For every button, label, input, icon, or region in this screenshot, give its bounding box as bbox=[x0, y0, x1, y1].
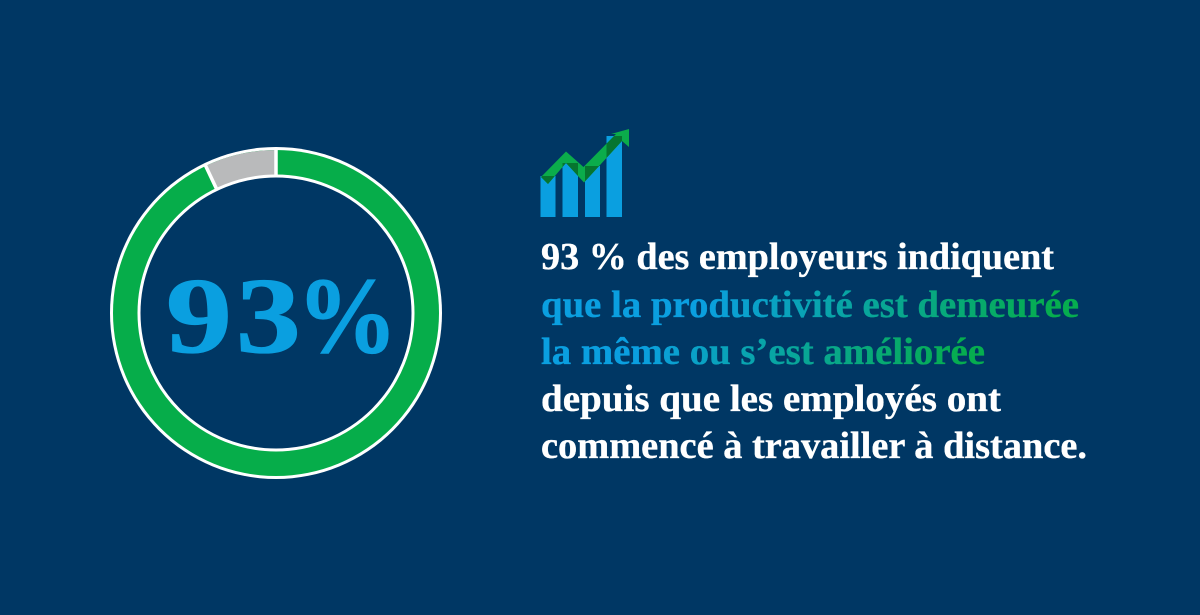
ring: green segment 93% bbox=[113, 150, 439, 476]
ring: white outline bbox=[110, 147, 442, 479]
line 1: 93 % des employeurs indiquent bbox=[541, 236, 1054, 278]
ring: grey segment 7% bbox=[206, 150, 276, 190]
big number: % bbox=[297, 256, 397, 376]
icon arrow overlap bbox=[541, 136, 622, 184]
line 3 highlighted: la même ou s’est améliorée bbox=[541, 331, 985, 373]
icon bars bbox=[540, 136, 622, 217]
line 4: depuis que les employés ont bbox=[541, 378, 1001, 420]
statement text bbox=[541, 236, 1087, 467]
icon: rising bar chart with arrow bbox=[540, 129, 629, 217]
line 5: commencé à travailler à distance. bbox=[541, 425, 1087, 467]
big number: 3 bbox=[236, 256, 301, 376]
ring: segment separators bbox=[205, 149, 276, 192]
big number: 9 bbox=[166, 257, 232, 376]
big number bbox=[166, 256, 397, 376]
icon arrow bbox=[541, 129, 629, 184]
donut chart: 93% bbox=[110, 147, 442, 479]
ring: inner white line and centre bbox=[139, 176, 413, 450]
line 2 highlighted: que la productivité est demeurée bbox=[541, 284, 1079, 326]
